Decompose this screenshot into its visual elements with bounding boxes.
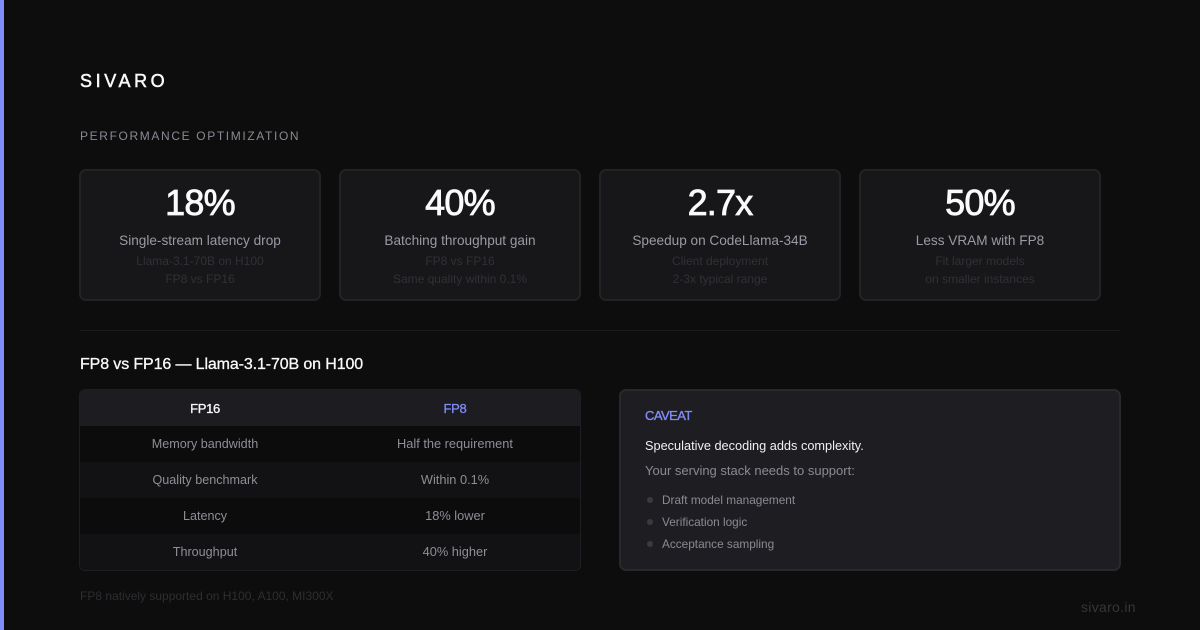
stat card: 40%: Batching throughput gain — [384, 233, 536, 248]
stat card: 2.7x: 2.7x — [688, 182, 752, 223]
row: memory bandwidth: Memory bandwidth — [152, 437, 258, 451]
bullet: verification — [647, 515, 747, 529]
row: latency — [80, 498, 580, 534]
stat card: 18%: Llama-3.1-70B on H100 — [136, 254, 264, 268]
bullet list: Verification logic — [662, 515, 747, 529]
section label: PERFORMANCE OPTIMIZATION — [80, 129, 300, 143]
caveat statement: Speculative decoding adds complexity. — [645, 438, 864, 453]
stat card: 50%: 50% — [945, 182, 1015, 223]
row: latency: 18% lower — [425, 508, 485, 523]
stat card: 18%: 18% — [165, 182, 235, 223]
stat card: 18% — [79, 169, 321, 301]
stat card: 50%: Fit larger models — [935, 254, 1025, 268]
accent bar — [0, 0, 4, 630]
comparison heading: FP8 vs FP16 — Llama-3.1-70B on H100 — [80, 356, 363, 373]
bullet: draft model — [647, 493, 796, 507]
table header: FP16 — [190, 401, 220, 416]
row: quality benchmark — [80, 462, 580, 498]
comparison table — [79, 389, 581, 571]
row: throughput: 40% higher — [423, 544, 487, 559]
row: memory bandwidth: Half the requirement — [397, 436, 513, 451]
caveat heading: CAVEAT — [645, 408, 692, 423]
logo: SIVARO: SIVARO — [80, 71, 168, 91]
row: latency: Latency — [183, 509, 227, 523]
row: quality benchmark: Within 0.1% — [421, 472, 489, 487]
stat card: 50% — [859, 169, 1101, 301]
table header: FP8 — [444, 401, 466, 416]
stat card: 50%: Less VRAM with FP8 — [916, 233, 1044, 248]
caveat panel — [619, 389, 1121, 571]
row: throughput: Throughput — [173, 545, 237, 559]
stat card: 2.7x: Client deployment — [672, 254, 768, 268]
bullet list: Draft model management — [662, 493, 795, 507]
footer url: sivaro.in — [1081, 599, 1136, 615]
table header — [80, 390, 580, 426]
bullet list — [647, 493, 796, 551]
footnote: FP8 natively supported on H100, A100, MI300X — [80, 589, 334, 603]
stat card: 2.7x: 2-3x typical range — [673, 272, 767, 286]
caveat subtext: Your serving stack needs to support: — [645, 463, 855, 478]
stat card: 50%: on smaller instances — [925, 272, 1035, 286]
stat card: 40%: Same quality within 0.1% — [393, 272, 527, 286]
stat card: 40%: 40% — [425, 182, 495, 223]
stat card: 18%: FP8 vs FP16 — [165, 272, 235, 286]
stat card: 18%: Single-stream latency drop — [119, 233, 281, 248]
stat card: 40% — [339, 169, 581, 301]
row: quality benchmark: Quality benchmark — [152, 473, 258, 487]
bullet list: Acceptance sampling — [662, 537, 774, 551]
stat card: 40%: FP8 vs FP16 — [425, 254, 495, 268]
bullet: acceptance — [647, 537, 774, 551]
stat card: 2.7x — [599, 169, 841, 301]
row: memory bandwidth — [80, 426, 580, 462]
stat card: 2.7x: Speedup on CodeLlama-34B — [632, 233, 808, 248]
row: throughput — [80, 534, 580, 570]
